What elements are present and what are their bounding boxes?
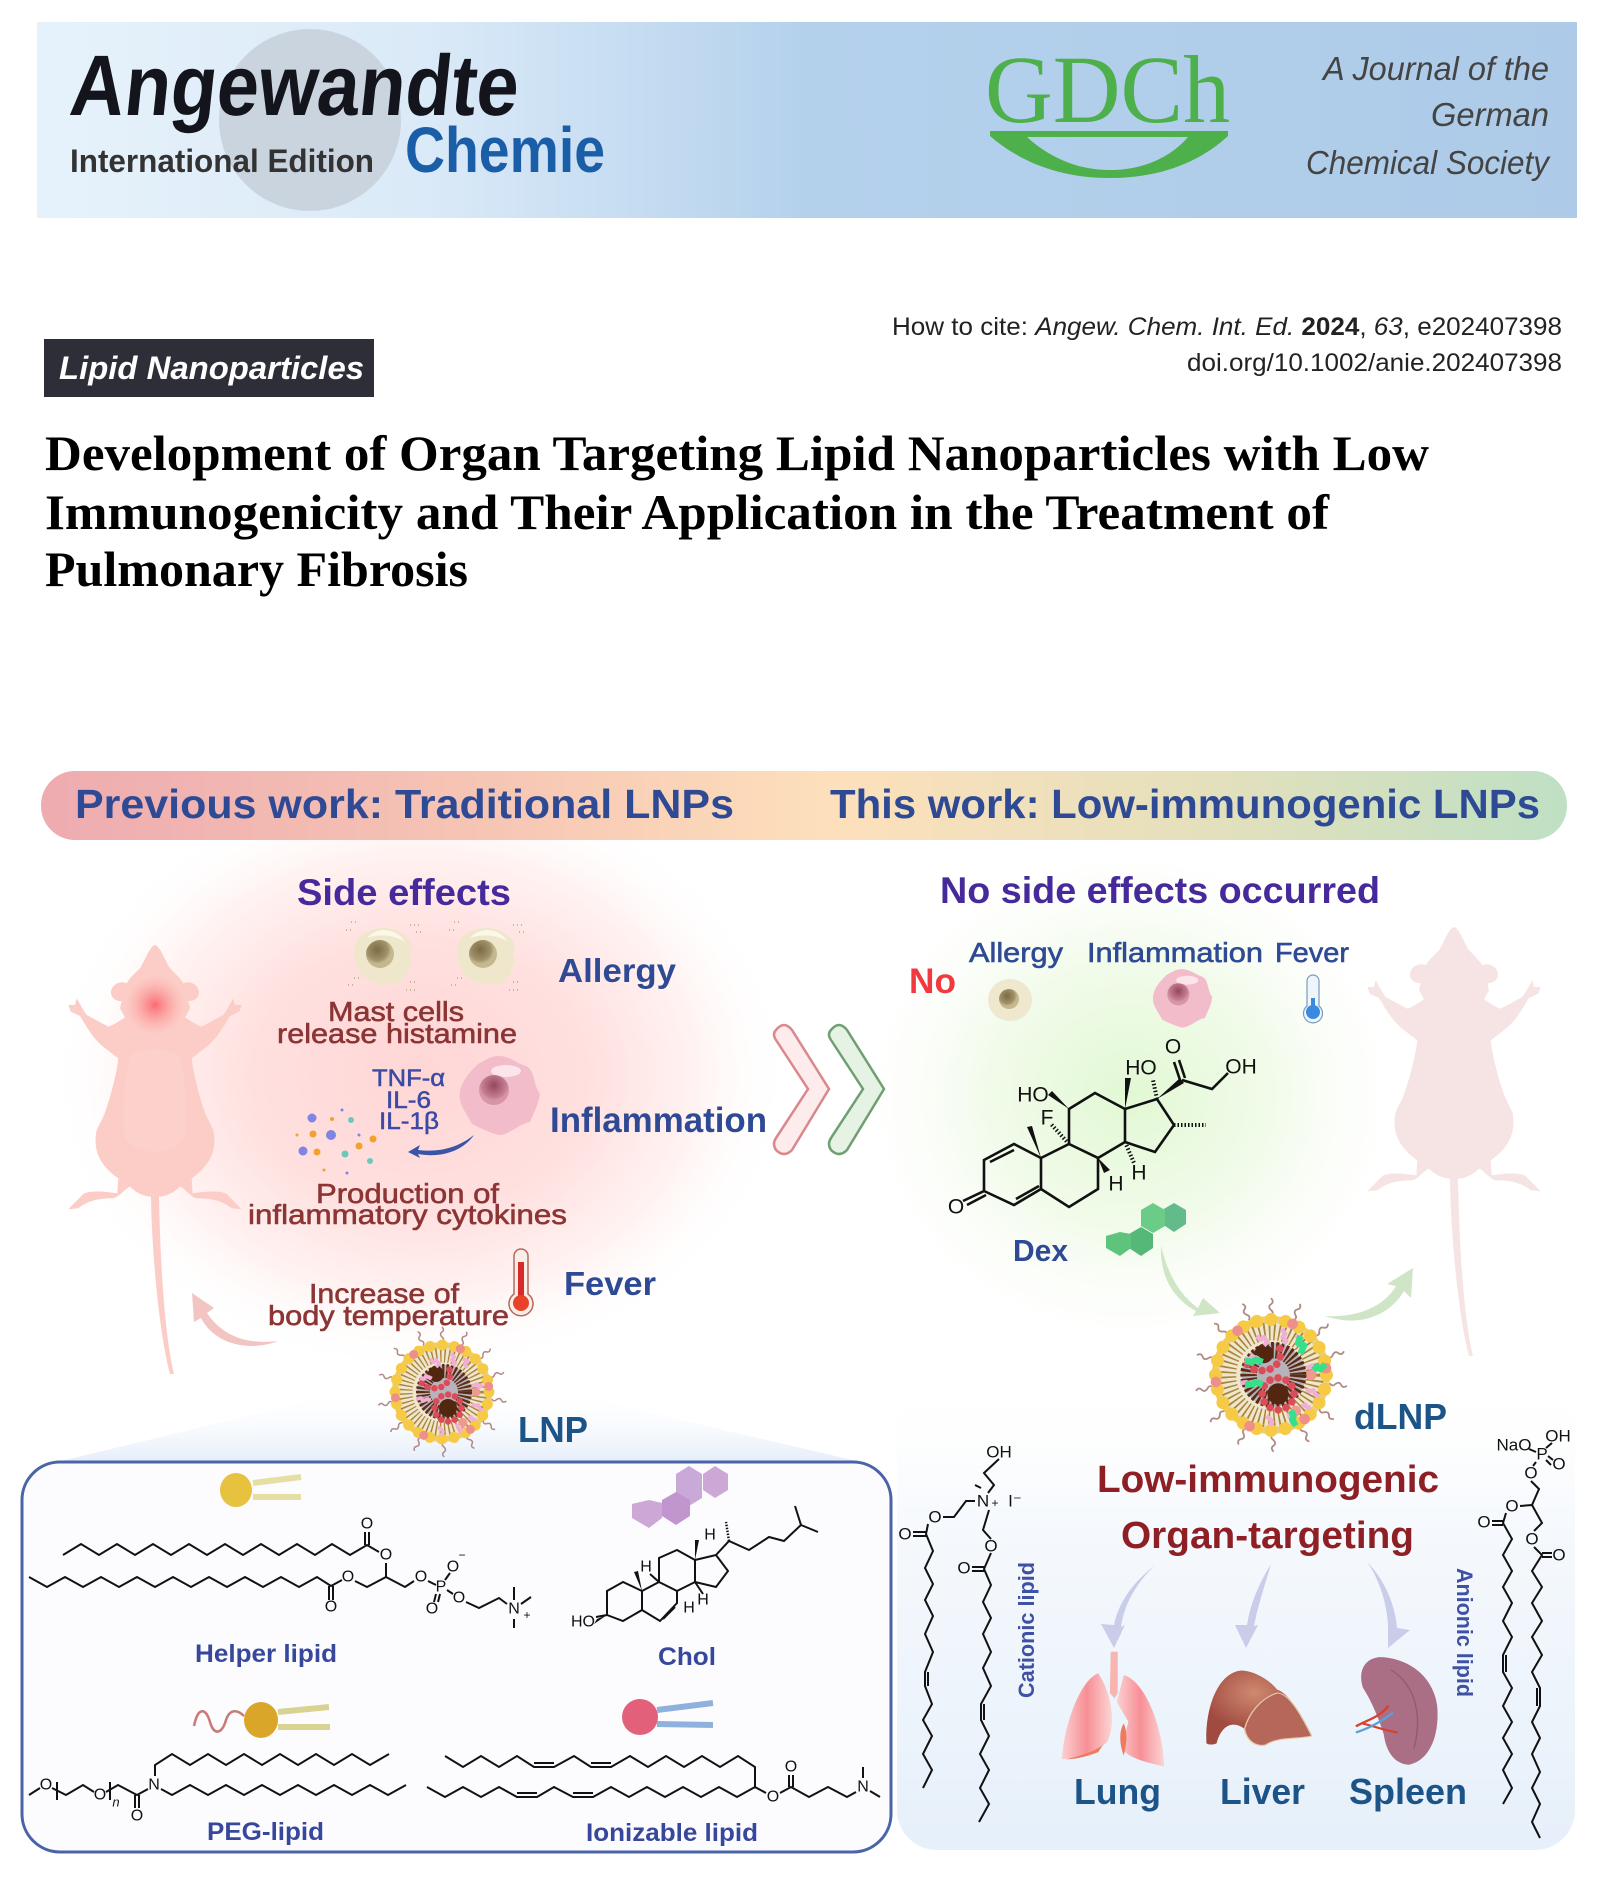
cytokine names: IL-6 <box>386 1087 431 1114</box>
organ-targeting heading: Organ-targeting <box>1121 1515 1414 1557</box>
comparison header pill <box>41 771 1567 840</box>
dexamethasone structure <box>948 1036 1257 1218</box>
icon: cholesterol <box>632 1466 728 1528</box>
icon: lung <box>1062 1652 1164 1766</box>
PEG lipid structure: n <box>112 1794 120 1810</box>
cationic lipid structure: O <box>957 1558 971 1578</box>
organ labels <box>1074 1771 1467 1812</box>
anionic lipid structure: O <box>1477 1512 1491 1532</box>
cholesterol structure: H <box>640 1558 652 1576</box>
helper lipid structure: O <box>325 1598 337 1616</box>
PEG lipid structure: O <box>94 1786 106 1804</box>
cationic lipid structure: + <box>991 1496 999 1510</box>
helper lipid structure: O <box>342 1568 354 1586</box>
dexamethasone structure: OH <box>1225 1056 1257 1078</box>
PEG lipid structure: O <box>131 1808 143 1824</box>
right bottom panel <box>897 1376 1575 1850</box>
anionic lipid structure: O <box>1524 1464 1538 1482</box>
cholesterol structure: HO <box>571 1614 595 1630</box>
cytokine caption: Production of <box>316 1178 499 1209</box>
anionic lipid structure <box>1477 1426 1571 1838</box>
icon: liver <box>1206 1670 1312 1745</box>
side effects heading: Side effects <box>297 872 511 913</box>
comparison header pill: This work: Low-immunogenic LNPs <box>830 781 1540 827</box>
cytokine caption <box>248 1178 567 1230</box>
cationic lipid structure: O <box>928 1508 942 1526</box>
icon: thermometer hot <box>509 1249 533 1316</box>
helper lipid structure: N <box>508 1600 520 1618</box>
icon: inflammatory cell <box>460 1056 540 1135</box>
journal header banner <box>37 22 1577 218</box>
arrow: Dex to dLNP <box>1161 1246 1220 1316</box>
dexamethasone structure: H <box>1131 1162 1147 1184</box>
helper lipid structure: O <box>415 1568 427 1586</box>
low-immunogenic heading: Low-immunogenic <box>1097 1459 1439 1501</box>
PEG lipid structure: N <box>148 1776 160 1794</box>
mouse: left <box>68 945 242 1374</box>
cytokine names: TNF-α <box>372 1065 445 1092</box>
dexamethasone structure: HO <box>1125 1056 1157 1080</box>
helper lipid structure <box>29 1516 531 1628</box>
section tag: Lipid Nanoparticles <box>59 350 364 386</box>
PEG lipid structure <box>29 1754 406 1824</box>
organ labels: Liver <box>1220 1771 1305 1812</box>
anionic lipid structure: NaO <box>1497 1436 1531 1454</box>
ionizable lipid structure: O <box>785 1758 797 1776</box>
comparison header pill: Previous work: Traditional LNPs <box>75 781 734 827</box>
temperature caption: body temperature <box>268 1300 509 1331</box>
Angewandte logotype: Angewandte <box>66 38 524 134</box>
No label: No <box>909 962 956 1001</box>
organ labels: Lung <box>1074 1771 1161 1812</box>
journal of the society text <box>1306 50 1551 181</box>
cationic lipid structure: N <box>977 1492 989 1510</box>
PEG lipid structure: O <box>40 1776 52 1794</box>
helper lipid structure: O <box>453 1590 465 1606</box>
absent effect labels <box>969 937 1349 968</box>
helper lipid structure: O <box>426 1600 438 1618</box>
icon: spleen <box>1356 1657 1438 1765</box>
journal of the society text: A Journal of the <box>1321 50 1549 87</box>
anionic lipid structure: OH <box>1545 1426 1571 1446</box>
title: Pulmonary Fibrosis <box>45 541 468 597</box>
cationic lipid structure: O <box>984 1536 998 1556</box>
GDCh logo: GDCh <box>985 36 1230 143</box>
dexamethasone structure: O <box>948 1196 964 1218</box>
dLNP label: dLNP <box>1354 1396 1447 1437</box>
icon: ionizable lipid <box>622 1699 713 1735</box>
cytokine names <box>372 1065 445 1135</box>
ionizable lipid structure <box>427 1756 880 1806</box>
section tag <box>44 339 374 397</box>
no side effects heading: No side effects occurred <box>940 870 1380 911</box>
arrow: LNP to mouse <box>192 1293 278 1346</box>
anionic lipid structure: P <box>1536 1444 1548 1464</box>
allergy label: Allergy <box>558 952 677 989</box>
ionizable lipid structure: O <box>767 1788 779 1806</box>
background glow: red <box>50 775 790 1375</box>
citation: doi.org/10.1002/anie.202407398 <box>1187 349 1562 377</box>
cholesterol structure: H <box>704 1526 716 1544</box>
arrow: to lung <box>1101 1566 1154 1648</box>
icon: small inflammatory cell <box>1153 969 1212 1028</box>
mast cells caption <box>277 996 517 1049</box>
cholesterol structure: H <box>697 1592 709 1608</box>
PEG lipid label: PEG-lipid <box>207 1818 324 1846</box>
LNP particle <box>378 1327 507 1457</box>
Chemie logotype: Chemie <box>405 114 605 186</box>
mast cells caption: release histamine <box>277 1018 517 1049</box>
cholesterol structure <box>571 1506 818 1630</box>
dexamethasone structure: HO <box>1017 1084 1049 1106</box>
mouse: right <box>1367 927 1541 1356</box>
background glow: green <box>840 825 1420 1365</box>
helper lipid structure: O <box>380 1546 392 1564</box>
title <box>45 425 1429 597</box>
absent effect labels: Allergy <box>969 937 1063 968</box>
icon: mast cells <box>346 922 524 990</box>
helper lipid structure: O <box>447 1558 459 1576</box>
anionic lipid label: Anionic lipid <box>1452 1568 1477 1697</box>
organ labels: Spleen <box>1349 1771 1467 1812</box>
helper lipid label: Helper lipid <box>195 1640 337 1668</box>
cationic lipid structure <box>898 1442 1022 1822</box>
absent effect labels: Fever <box>1275 937 1349 968</box>
helper lipid structure: O <box>361 1516 373 1532</box>
anionic lipid structure: O <box>1552 1546 1566 1564</box>
icon: small mast cell <box>988 979 1032 1021</box>
mast cells caption: Mast cells <box>328 996 464 1027</box>
arrow: cytokine release <box>408 1135 474 1158</box>
panel: LNP components <box>22 1462 891 1852</box>
cytokine caption: inflammatory cytokines <box>248 1199 567 1230</box>
arrow: to spleen <box>1367 1562 1410 1648</box>
cytokine names: IL-1β <box>379 1108 439 1135</box>
arrow: dLNP to mouse <box>1325 1268 1413 1321</box>
anionic lipid structure: O <box>1552 1454 1566 1474</box>
dexamethasone structure: H <box>1108 1172 1124 1196</box>
title: Immunogenicity and Their Application in the Treatment of <box>45 484 1330 540</box>
absent effect labels: Inflammation <box>1087 937 1263 968</box>
Dex label: Dex <box>1013 1233 1069 1268</box>
cationic lipid structure: O <box>898 1524 912 1544</box>
dexamethasone structure: F <box>1041 1106 1053 1130</box>
helper lipid structure: − <box>458 1548 466 1562</box>
journal of the society text: German <box>1431 96 1549 133</box>
icon: cytokine dots <box>296 1108 376 1174</box>
journal of the society text: Chemical Society <box>1306 144 1551 181</box>
panel connector trapezoid <box>57 1387 861 1462</box>
temperature caption <box>268 1278 509 1331</box>
LNP label: LNP <box>518 1409 588 1450</box>
cationic lipid structure: I⁻ <box>1008 1492 1022 1510</box>
cholesterol structure: H <box>683 1600 695 1616</box>
title: Development of Organ Targeting Lipid Nanoparticles with Low <box>45 425 1429 481</box>
edition text: International Edition <box>70 143 374 179</box>
anionic lipid structure: O <box>1525 1530 1539 1548</box>
icon: Dex molecule <box>1106 1203 1186 1256</box>
citation: How to cite: Angew. Chem. Int. Ed. 2024, 63, e202407398 <box>892 313 1562 341</box>
arrow: to liver <box>1235 1564 1271 1648</box>
icon: thermometer cool <box>1304 975 1323 1023</box>
anionic lipid structure: O <box>1505 1496 1519 1516</box>
icon: PEG lipid <box>194 1702 330 1738</box>
cationic lipid label: Cationic lipid <box>1014 1562 1039 1698</box>
inflammation label: Inflammation <box>550 1101 767 1140</box>
helper lipid structure: P <box>436 1578 446 1596</box>
icon: helper lipid <box>220 1473 301 1507</box>
helper lipid structure: + <box>523 1608 531 1622</box>
fever label: Fever <box>564 1265 656 1302</box>
dLNP particle <box>1196 1298 1347 1452</box>
ionizable lipid structure: N <box>857 1778 869 1796</box>
cationic lipid structure: OH <box>986 1442 1012 1462</box>
cholesterol label: Chol <box>658 1643 716 1671</box>
chevrons <box>774 1025 884 1154</box>
ionizable lipid label: Ionizable lipid <box>586 1819 758 1847</box>
temperature caption: Increase of <box>309 1278 459 1309</box>
citation <box>892 313 1562 377</box>
dexamethasone structure: O <box>1165 1036 1181 1058</box>
